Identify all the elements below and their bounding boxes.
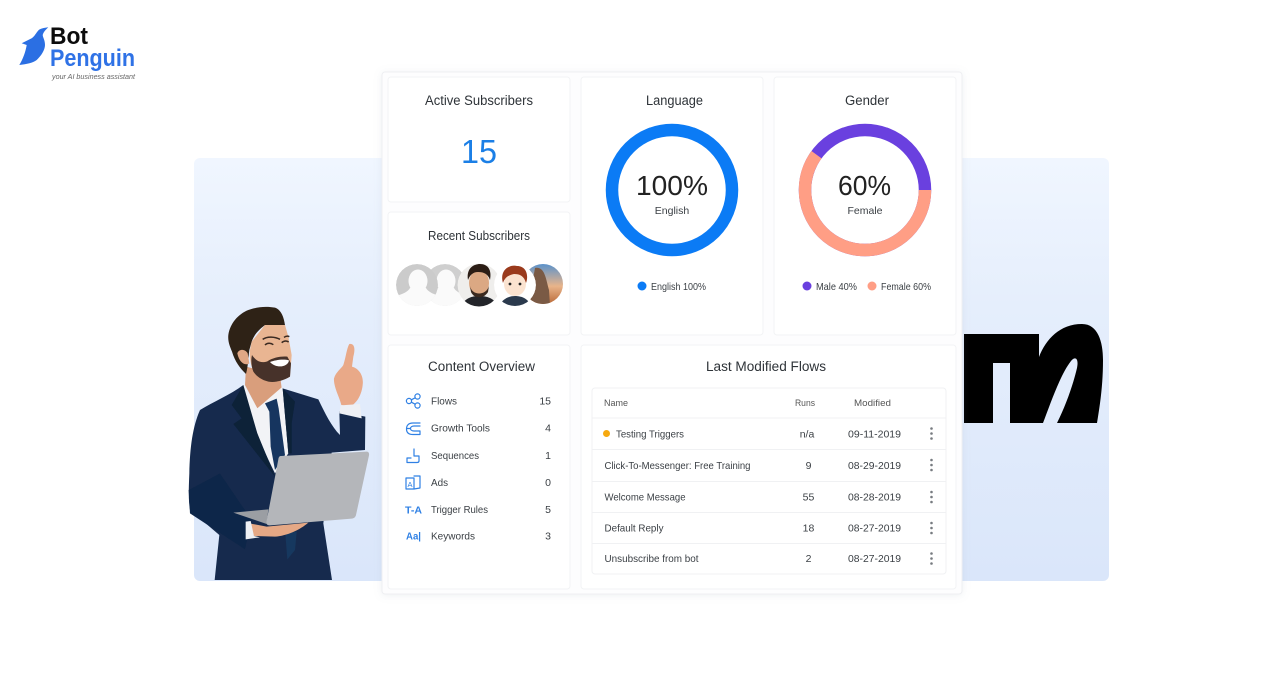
row: growth tools: 4 [545, 422, 551, 434]
panel: gender [774, 77, 956, 335]
row: unsubscribe from bot: 2 [806, 553, 812, 565]
table header: Name [604, 398, 628, 409]
avatar: landscape photo [529, 264, 563, 304]
row: growth tools: Growth Tools [431, 422, 490, 434]
avatar: man photo [458, 264, 500, 307]
black abstract shape [964, 324, 1103, 423]
row: welcome message [604, 491, 933, 504]
ear front [237, 350, 249, 364]
logo: BotPenguin [19, 23, 136, 81]
tie [265, 399, 285, 470]
row: trigger rules: 5 [545, 504, 551, 516]
row: unsubscribe from bot: Unsubscribe from bot [604, 553, 699, 565]
heading: Gender [845, 93, 889, 108]
avatar: placeholder 1 [396, 264, 438, 306]
donut label: Female [847, 205, 883, 217]
eyes [263, 336, 289, 345]
row: welcome message: Welcome Message [604, 492, 686, 504]
laptop base [233, 509, 268, 524]
donut chart: gender [805, 130, 925, 250]
row: sequences [407, 449, 551, 462]
row: unsubscribe from bot: 08-27-2019 [848, 553, 901, 565]
row: click-to-messenger [604, 459, 933, 472]
raised hand [334, 344, 363, 407]
row: flows: Flows [431, 396, 457, 408]
logo word: Penguin: Penguin [50, 45, 135, 72]
donut value: 100% [636, 170, 708, 201]
legend: male [802, 281, 857, 293]
heading: Recent Subscribers [428, 229, 530, 243]
heading: Last Modified Flows [706, 359, 826, 374]
heading: Content Overview [428, 359, 535, 374]
row: keywords: Keywords [431, 530, 475, 542]
table header: Modified [854, 398, 891, 409]
row: keywords: 3 [545, 530, 551, 542]
row: trigger rules: T-A [405, 504, 422, 516]
jacket [189, 385, 365, 580]
shirt [243, 383, 290, 477]
cuff [339, 404, 362, 418]
dashboard background [382, 72, 962, 594]
row: trigger rules [405, 504, 551, 516]
panel: content overview [388, 345, 570, 589]
smile [270, 360, 289, 366]
legend: female: Female 60% [881, 281, 931, 293]
jacket sleeve [189, 473, 252, 549]
row: keywords: Aa| [406, 530, 421, 542]
row: sequences: 1 [545, 450, 551, 462]
table header [604, 398, 891, 409]
row: flows: 15 [539, 396, 551, 408]
avatar: placeholder 2 [431, 264, 462, 306]
heading: Language [646, 93, 703, 108]
row: ads: 0 [545, 477, 551, 489]
logo word: Bot: Bot [50, 23, 88, 50]
row: ads: Ads [431, 477, 448, 489]
row: click-to-messenger: 08-29-2019 [848, 460, 901, 472]
legend: female [868, 281, 931, 293]
value: 15 [461, 133, 497, 170]
donut label: English [655, 205, 689, 217]
dashboard card [382, 72, 962, 594]
hair [228, 307, 285, 374]
table [592, 388, 946, 574]
background panel [194, 158, 1109, 581]
lower hand [249, 523, 308, 537]
row: click-to-messenger: 9 [806, 460, 812, 472]
panel: language [581, 77, 763, 335]
row: ads: A [408, 480, 413, 489]
avatar: cartoon boy [494, 264, 536, 306]
neck [245, 367, 282, 408]
donut value: 60% [838, 170, 891, 201]
laptop lid [266, 452, 369, 525]
row: testing triggers: n/a [800, 428, 814, 440]
row: ads [406, 476, 551, 489]
panel: last modified flows [581, 345, 956, 589]
heading: Active Subscribers [425, 93, 533, 108]
tagline: your AI business assistant [51, 74, 136, 81]
beard [251, 355, 291, 382]
row: testing triggers: 09-11-2019 [848, 428, 901, 440]
row: unsubscribe from bot [604, 552, 933, 565]
row: welcome message: 55 [803, 492, 814, 504]
row: default reply: Default Reply [604, 522, 664, 534]
lapels [232, 385, 295, 477]
row: growth tools [406, 422, 551, 434]
row: flows [406, 394, 551, 408]
table header: Runs [795, 398, 815, 409]
row: default reply: 08-27-2019 [848, 522, 901, 534]
ear [237, 348, 248, 365]
lower tie [285, 532, 297, 559]
row: testing triggers [603, 427, 933, 440]
icon: penguin [19, 27, 48, 65]
face [250, 325, 292, 382]
row: sequences: Sequences [431, 450, 479, 462]
row: default reply [604, 522, 933, 534]
donut chart: language [612, 130, 732, 250]
row: testing triggers: Testing Triggers [616, 428, 684, 440]
panel: active subscribers [388, 77, 570, 202]
man with laptop [189, 307, 369, 580]
row: keywords [406, 530, 551, 542]
panel: recent subscribers [388, 212, 570, 335]
row: click-to-messenger: Click-To-Messenger: Free Training [604, 460, 751, 472]
row: trigger rules: Trigger Rules [431, 504, 488, 516]
legend: male: Male 40% [816, 281, 857, 293]
lower cuff [246, 521, 260, 539]
row: welcome message: 08-28-2019 [848, 492, 901, 504]
legend: english: English 100% [651, 281, 706, 293]
row: default reply: 18 [803, 522, 814, 534]
